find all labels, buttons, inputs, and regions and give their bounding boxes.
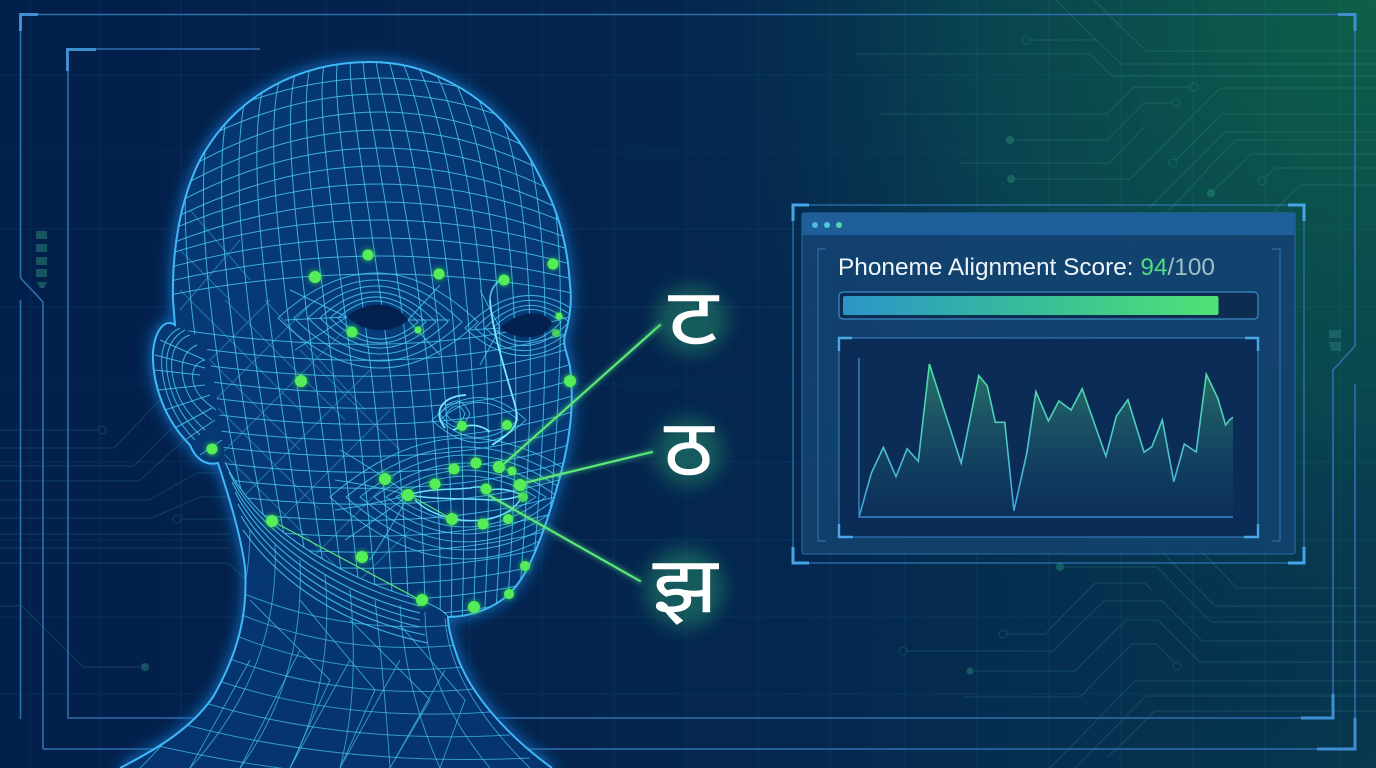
spokes — [285, 285, 500, 560]
face mesh — [174, 63, 571, 616]
glyph: jha: झ — [653, 544, 720, 644]
eye contour rings — [278, 273, 478, 368]
mesh longitudes — [167, 55, 440, 625]
connector glow — [490, 325, 660, 581]
score heading: Phoneme Alignment Score: 94/100 — [838, 254, 1215, 281]
glyph glow halos — [645, 286, 728, 628]
lips — [409, 487, 522, 521]
mesh latitudes lower — [187, 316, 571, 614]
nose and brow highlights — [439, 280, 517, 445]
nose rings — [432, 398, 526, 442]
head fill and mesh — [124, 63, 571, 768]
head glow — [120, 62, 572, 768]
glyph: ta: ट — [668, 275, 719, 377]
side indicator: faint right icon — [1329, 330, 1341, 351]
glyph: tha: ठ — [664, 406, 715, 508]
neck mesh — [140, 530, 560, 768]
triangulated cheek mesh — [180, 210, 410, 600]
jaw tracking line — [274, 495, 452, 600]
ear — [155, 328, 222, 455]
connector lines from mouth to phoneme glyphs — [274, 325, 660, 600]
connector: jha — [490, 496, 640, 581]
phoneme glyphs — [645, 275, 728, 644]
eye openings — [347, 305, 408, 330]
facial landmark dots — [206, 250, 576, 613]
jaw bundle — [225, 462, 448, 643]
progress bar — [839, 292, 1258, 319]
head outline — [120, 62, 572, 768]
panel window — [802, 213, 1295, 554]
mouth contour rings — [329, 438, 562, 560]
waveform chart — [839, 338, 1258, 537]
mesh latitudes upper — [174, 78, 570, 295]
connector: ta — [505, 325, 660, 463]
panel bracket frame — [793, 205, 1304, 563]
score panel — [793, 205, 1304, 563]
connector: tha — [520, 452, 652, 484]
side indicator: green level blocks — [36, 231, 47, 288]
wireframe head — [100, 50, 602, 768]
panel title bar — [802, 213, 1295, 235]
